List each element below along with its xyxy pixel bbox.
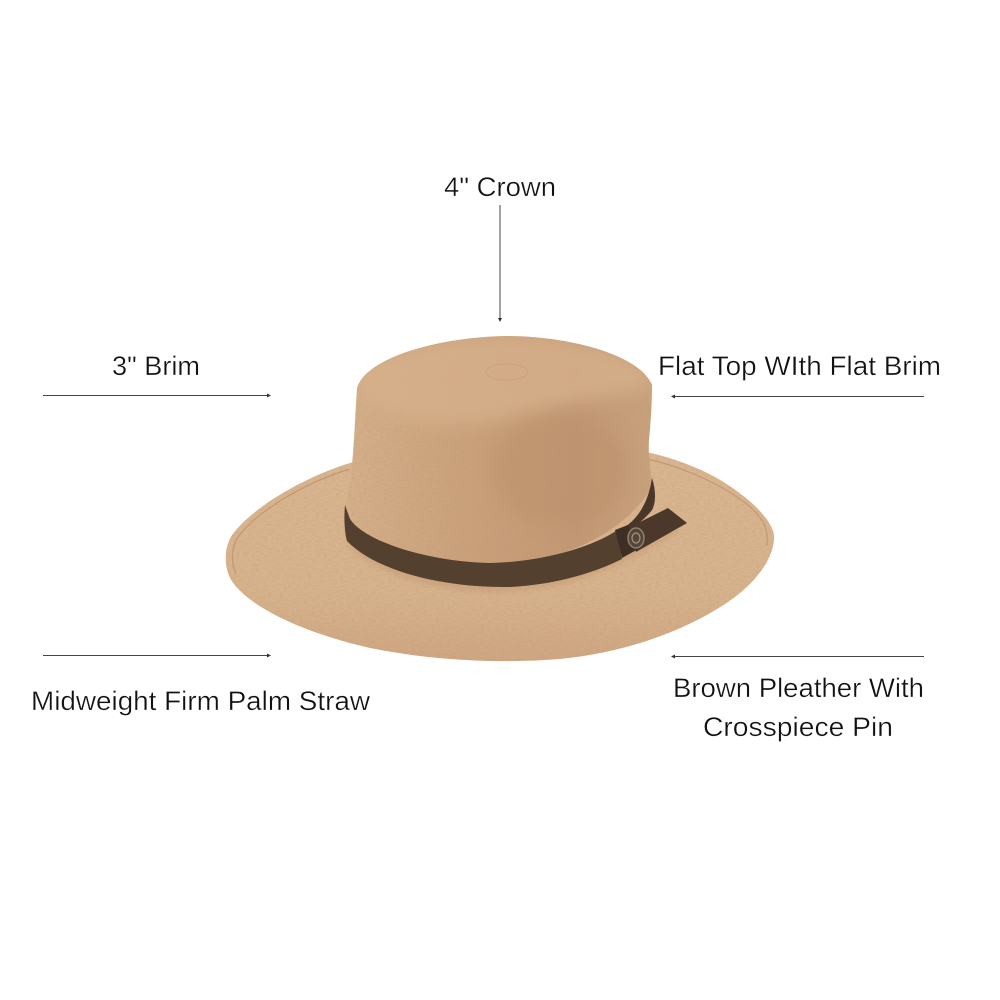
brim edge stitching	[232, 459, 767, 574]
hat brim	[226, 452, 774, 661]
label: Midweight Firm Palm Straw: Midweight Firm Palm Straw	[31, 686, 371, 716]
label: 4" Crown: 4" Crown	[444, 172, 556, 202]
hat band	[344, 505, 622, 587]
label: 3" Brim: 3" Brim	[112, 351, 200, 381]
label: Brown Pleather With Crosspiece Pin: Crosspiece Pin	[703, 712, 893, 742]
band upper right strip	[618, 478, 655, 534]
crown dark centre	[490, 415, 630, 525]
crown top button	[486, 364, 528, 380]
label: 4" Crown	[444, 172, 556, 322]
label: 3" Brim	[43, 351, 271, 398]
crosspiece pin	[628, 528, 644, 548]
hat illustration	[226, 333, 774, 661]
band loop	[615, 525, 640, 558]
crown shading	[356, 336, 650, 424]
label: Flat Top With Flat Brim	[658, 351, 941, 398]
band shadow on brim	[348, 520, 680, 592]
label: Midweight Firm Palm Straw	[31, 654, 371, 716]
label: Brown Pleather With Crosspiece Pin: Brown Pleather With	[673, 673, 924, 703]
hat crown	[345, 336, 653, 565]
crown top highlight	[350, 333, 655, 425]
label: Brown Pleather With Crosspiece Pin	[671, 654, 924, 742]
band tail	[628, 508, 687, 552]
label: Flat Top With Flat Brim: Flat Top WIth Flat Brim	[658, 351, 941, 381]
